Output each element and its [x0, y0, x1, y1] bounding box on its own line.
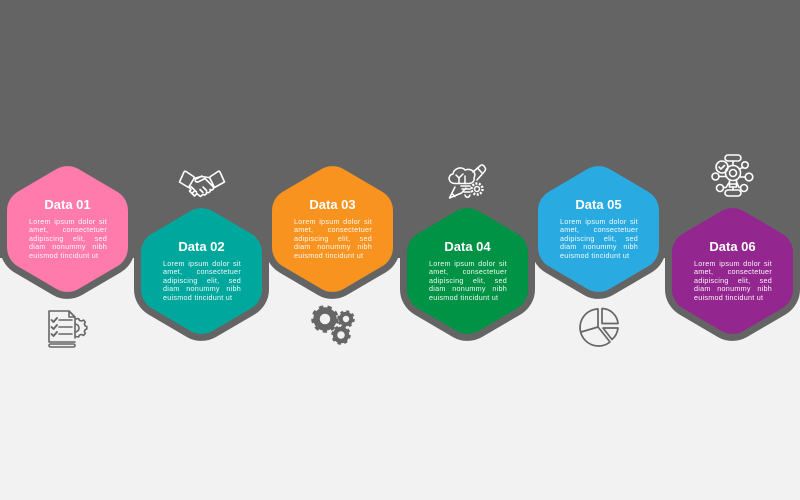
- text block: Data 05: diam nonummy nibh: [560, 242, 638, 251]
- text block: Data 06: [694, 258, 772, 302]
- text block: Data 02: Lorem ipsum dolor sit: [163, 258, 241, 268]
- text block: Data 05: adipiscing elit, sed: [560, 234, 638, 242]
- text block: Data 02: [163, 258, 241, 302]
- text block: Data 01: euismod tincidunt ut: [29, 250, 98, 260]
- panel: Data 05: [535, 166, 664, 299]
- text block: Data 02: adipiscing elit, sed: [163, 276, 241, 284]
- text block: Data 05: euismod tincidunt ut: [560, 250, 629, 260]
- text block: Data 06: diam nonummy nibh: [694, 284, 772, 293]
- text block: Data 04: amet, consectetuer: [429, 267, 507, 276]
- text block: Data 06: amet, consectetuer: [694, 267, 772, 276]
- text block: Data 04: [429, 258, 507, 302]
- text block: Data 02: diam nonummy nibh: [163, 284, 241, 293]
- heading: Data 03: Data 03: [309, 197, 356, 212]
- heading: Data 04: Data 04: [444, 239, 491, 254]
- text block: Data 05: Lorem ipsum dolor sit: [560, 216, 638, 226]
- text block: Data 04: diam nonummy nibh: [429, 284, 507, 293]
- text block: Data 01: [29, 216, 107, 260]
- text block: Data 01: diam nonummy nibh: [29, 242, 107, 251]
- text block: Data 05: amet, consectetuer: [560, 225, 638, 234]
- icon: gears: [313, 307, 354, 344]
- icon: checklist with gear: [49, 311, 87, 347]
- panel: Data 02: [134, 208, 269, 341]
- text block: Data 04: euismod tincidunt ut: [429, 292, 498, 302]
- text block: Data 03: amet, consectetuer: [294, 225, 372, 234]
- panel: Data 04: [400, 208, 535, 341]
- panel: Data 06: [665, 208, 800, 341]
- text block: Data 02: amet, consectetuer: [163, 267, 241, 276]
- text block: Data 03: diam nonummy nibh: [294, 242, 372, 251]
- text block: Data 01: adipiscing elit, sed: [29, 234, 107, 242]
- text block: Data 01: amet, consectetuer: [29, 225, 107, 234]
- text block: Data 03: adipiscing elit, sed: [294, 234, 372, 242]
- text block: Data 03: euismod tincidunt ut: [294, 250, 363, 260]
- text block: Data 03: Lorem ipsum dolor sit: [294, 216, 372, 226]
- text block: Data 03: [294, 216, 372, 260]
- icon: network with light bulb: [712, 155, 753, 196]
- heading: Data 02: Data 02: [178, 239, 225, 254]
- text block: Data 06: adipiscing elit, sed: [694, 276, 772, 284]
- heading: Data 01: Data 01: [44, 197, 91, 212]
- panel: Data 03: [269, 166, 398, 299]
- text block: Data 04: Lorem ipsum dolor sit: [429, 258, 507, 268]
- icon: handshake: [180, 171, 224, 196]
- panel: Data 01: [2, 166, 133, 299]
- text block: Data 02: euismod tincidunt ut: [163, 292, 232, 302]
- text block: Data 01: Lorem ipsum dolor sit: [29, 216, 107, 226]
- heading: Data 06: Data 06: [709, 239, 756, 254]
- heading: Data 05: Data 05: [575, 197, 622, 212]
- dark top background: [0, 0, 800, 258]
- text block: Data 06: euismod tincidunt ut: [694, 292, 763, 302]
- text block: Data 06: Lorem ipsum dolor sit: [694, 258, 772, 268]
- text block: Data 05: [560, 216, 638, 260]
- icon: pie chart: [580, 308, 618, 346]
- icon: creative cloud pencil bulb and gear: [449, 165, 486, 198]
- text block: Data 04: adipiscing elit, sed: [429, 276, 507, 284]
